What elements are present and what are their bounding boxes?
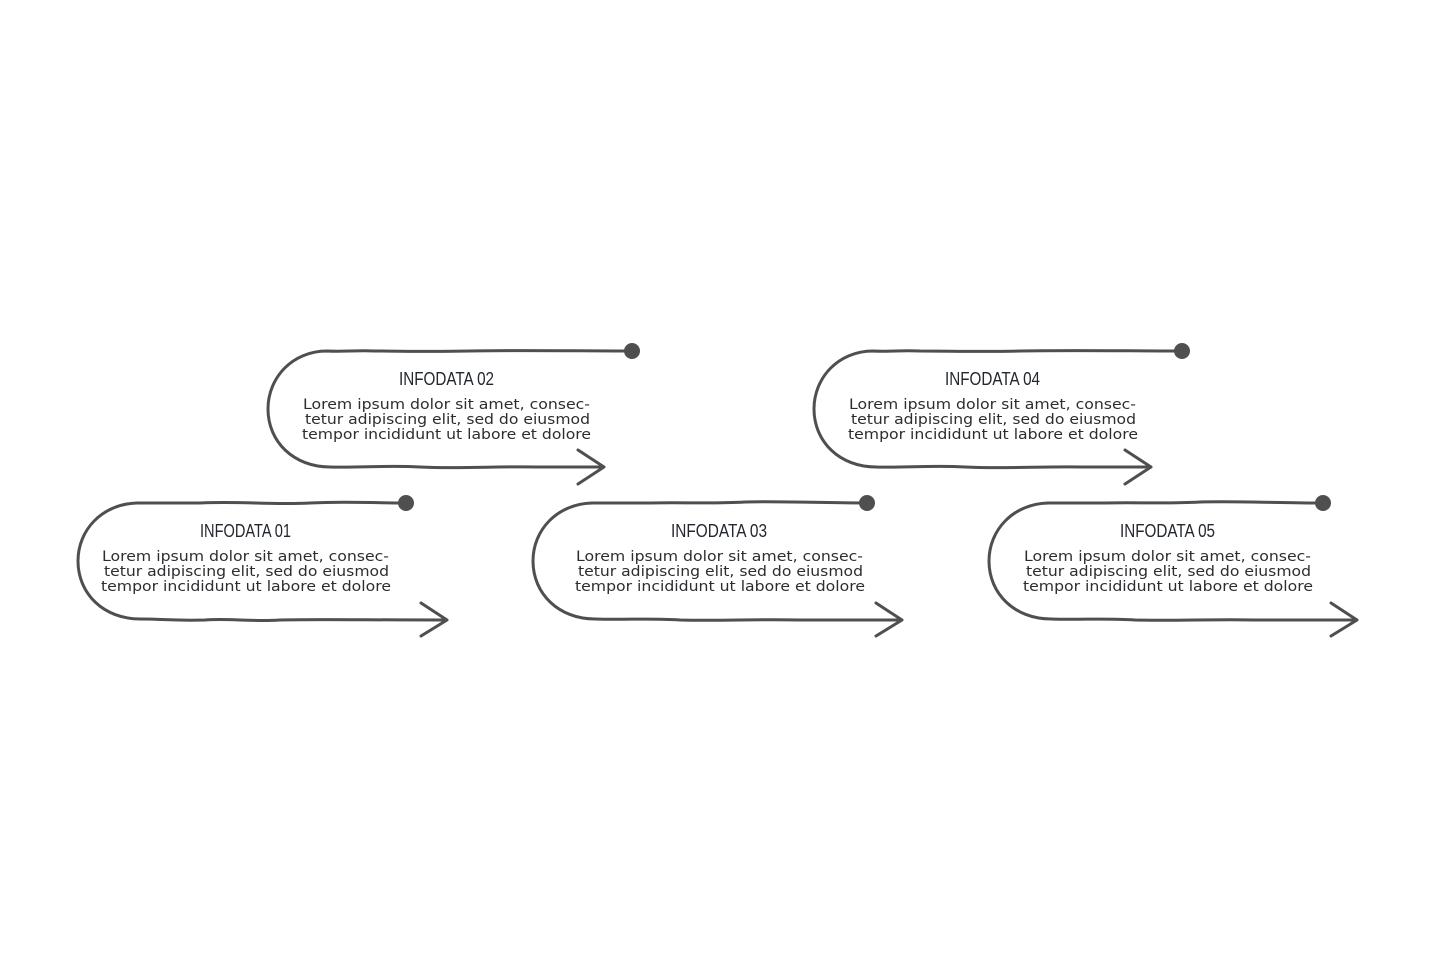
body text 05: Lorem ipsum dolor sit amet, consec- (1024, 549, 1311, 565)
body text 02: Lorem ipsum dolor sit amet, consec- (303, 397, 590, 413)
panel: infodata 05 (989, 495, 1357, 636)
body text 05: tetur adipiscing elit, sed do eiusmod (1026, 564, 1311, 580)
body text 03: tetur adipiscing elit, sed do eiusmod (578, 564, 863, 580)
arrow path 03 (533, 502, 902, 636)
body text 01: tempor incididunt ut labore et dolore (101, 579, 391, 595)
body text 05: tempor incididunt ut labore et dolore (1023, 579, 1313, 595)
arrow path 02 (268, 351, 632, 484)
body text 01 (101, 549, 391, 595)
body text 04: Lorem ipsum dolor sit amet, consec- (849, 397, 1136, 413)
body text 02 (302, 397, 591, 443)
arrow path 01 (78, 502, 447, 636)
panel: infodata 03 (533, 495, 902, 636)
arrow path 05 (989, 502, 1357, 636)
body text 04: tetur adipiscing elit, sed do eiusmod (851, 412, 1136, 428)
title 03: INFODATA 03 (671, 521, 767, 541)
body text 05 (1023, 549, 1313, 595)
dot 01 (398, 495, 414, 511)
dot 02 (624, 343, 640, 359)
body text 03: Lorem ipsum dolor sit amet, consec- (576, 549, 863, 565)
body text 01: Lorem ipsum dolor sit amet, consec- (102, 549, 389, 565)
title 04: INFODATA 04 (945, 369, 1040, 389)
dot 03 (859, 495, 875, 511)
title 01: INFODATA 01 (200, 521, 291, 541)
body text 01: tetur adipiscing elit, sed do eiusmod (104, 564, 389, 580)
body text 04: tempor incididunt ut labore et dolore (848, 427, 1138, 443)
panel: infodata 04 (814, 343, 1190, 484)
arrow path 04 (814, 351, 1182, 484)
dot 04 (1174, 343, 1190, 359)
title 05: INFODATA 05 (1120, 521, 1215, 541)
body text 03 (575, 549, 865, 595)
panel: infodata 02 (268, 343, 640, 484)
body text 04 (848, 397, 1138, 443)
body text 02: tempor incididunt ut labore et dolore (302, 427, 591, 443)
body text 03: tempor incididunt ut labore et dolore (575, 579, 865, 595)
panel: infodata 01 (78, 495, 447, 636)
dot 05 (1315, 495, 1331, 511)
title 02: INFODATA 02 (399, 369, 494, 389)
body text 02: tetur adipiscing elit, sed do eiusmod (305, 412, 590, 428)
